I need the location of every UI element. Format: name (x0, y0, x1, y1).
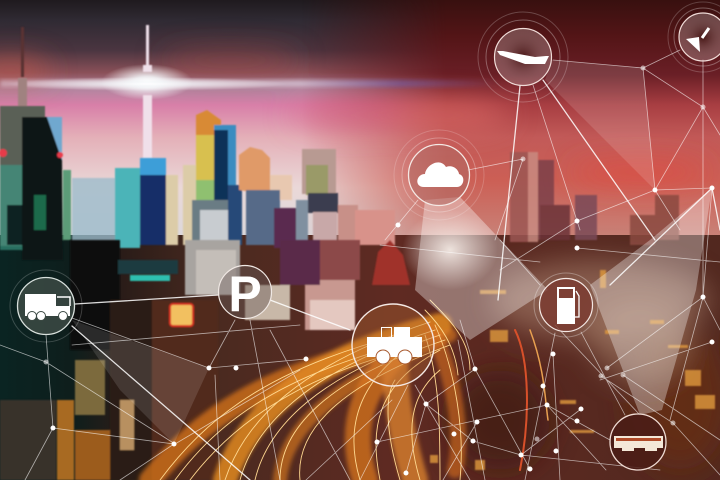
skyline: left towers (0, 27, 71, 260)
icon: train (610, 414, 666, 470)
skyline: mid buildings (72, 110, 410, 285)
lower city buildings (0, 240, 360, 480)
highway light trails (150, 300, 548, 480)
icon: parking sign (218, 266, 272, 322)
lower city base (0, 235, 720, 480)
icon: cloud (394, 130, 484, 220)
translucent network planes (72, 60, 712, 444)
network nodes (53, 188, 712, 473)
colour haze over the lower city (450, 260, 720, 470)
icon: satellite (668, 2, 720, 72)
scattered city lights (430, 270, 715, 470)
icon: airplane (478, 12, 568, 102)
faint network nodes (46, 68, 703, 439)
light band and tower glow (0, 64, 500, 100)
icon: parking sign: P (228, 266, 262, 322)
icon: utility van (352, 304, 434, 386)
icon: fuel pump (534, 273, 598, 337)
icon: truck (10, 270, 82, 342)
sky background (0, 0, 720, 250)
skyline: central tower (143, 25, 152, 170)
skyline: faded right buildings (510, 152, 679, 245)
